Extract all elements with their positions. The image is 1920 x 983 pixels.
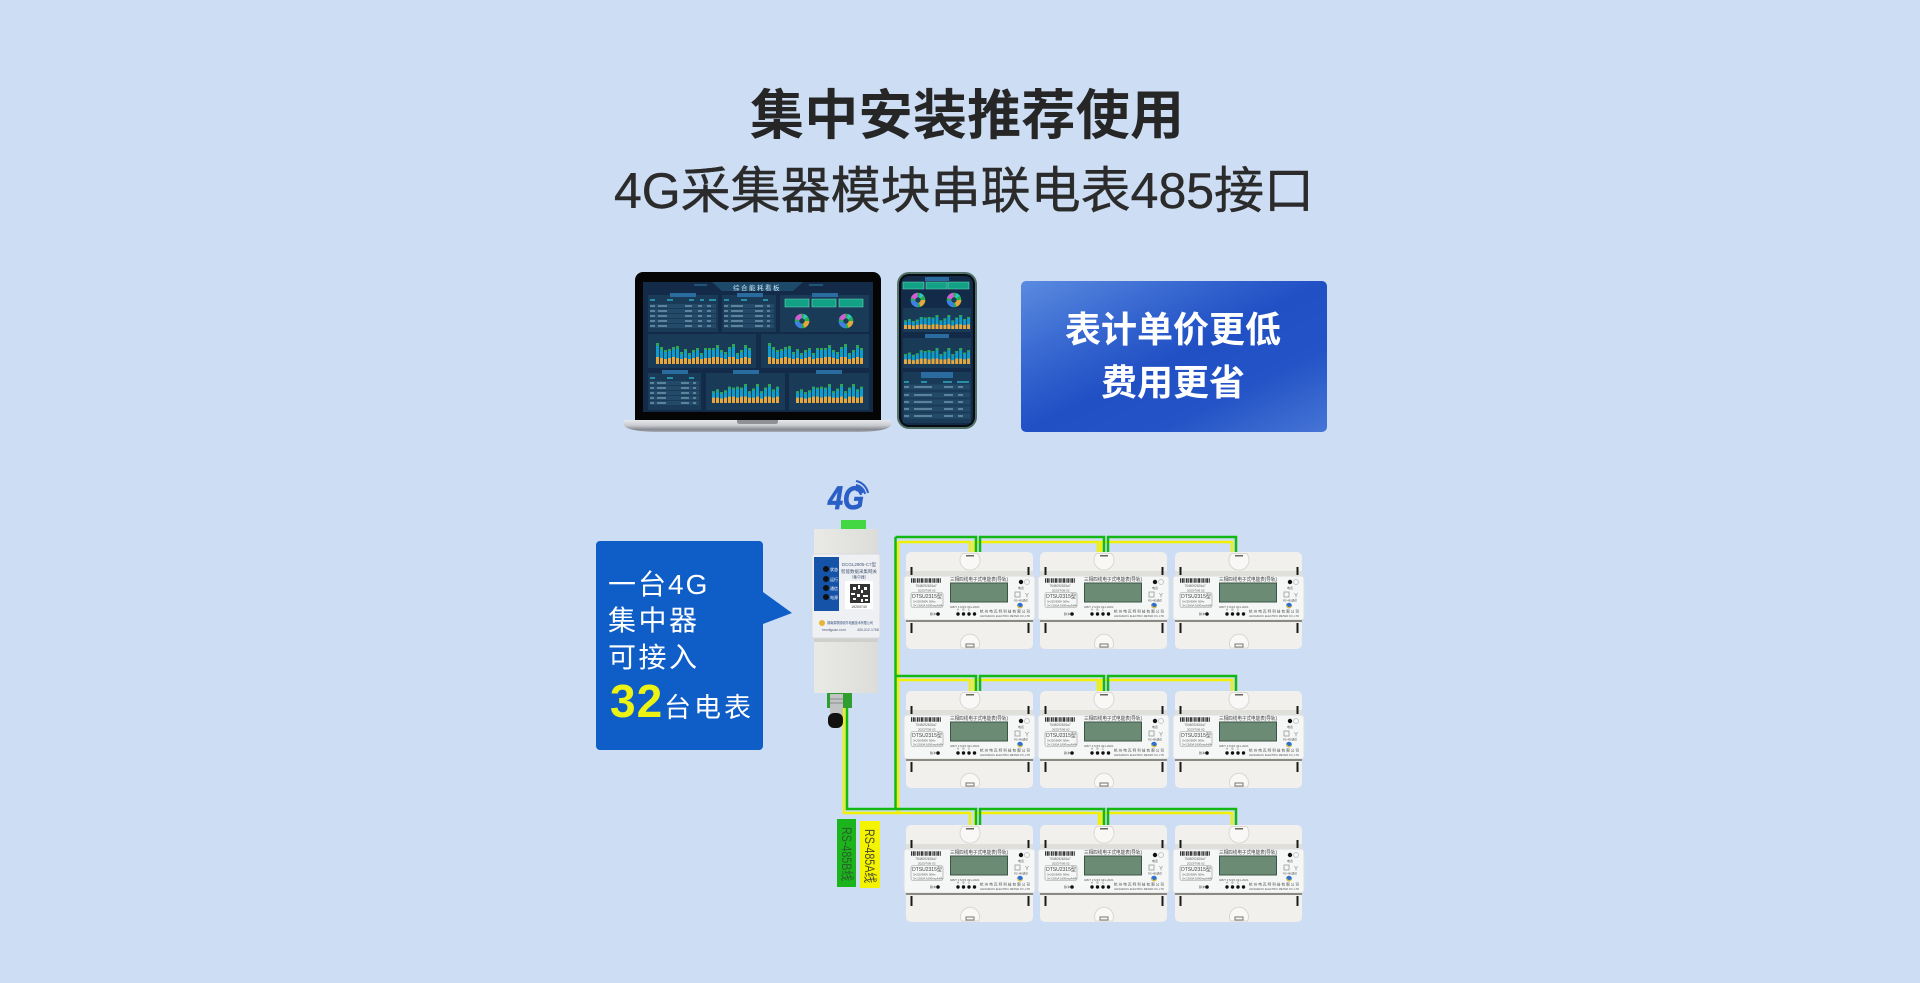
callout: one 4G concentrator connects 32 meters: 32	[610, 675, 663, 727]
callout: one 4G concentrator connects 32 meters: 可接入	[608, 642, 700, 673]
indicator strip: 状态	[830, 566, 838, 572]
callout button: lower meter price	[1021, 281, 1327, 432]
device face plate: 湖南易联德软件电器技术有限公司	[827, 620, 873, 625]
meter row 3 column 2	[1038, 825, 1169, 922]
meter row 2 column 2	[1038, 691, 1169, 788]
callout: one 4G concentrator connects 32 meters: 集中器	[608, 605, 700, 636]
callout: one 4G concentrator connects 32 meters	[596, 541, 792, 750]
label: RS-485 A line	[860, 821, 880, 888]
dashboard buttons	[785, 299, 863, 307]
indicator strip	[814, 557, 839, 611]
title: 集中安装推荐使用	[750, 71, 1184, 150]
wiring: RS-485 A line yellow	[844, 542, 1232, 825]
4G concentrator device	[812, 520, 880, 728]
wiring: RS-485 B line green	[847, 537, 1236, 825]
device face plate	[812, 554, 880, 638]
antenna connector	[828, 694, 843, 728]
QR code: 19200740	[851, 605, 867, 609]
device face plate: 400-012-1768	[857, 628, 879, 632]
subtitle: 4G采集器模块串联电表485接口	[614, 163, 1314, 219]
4G signal icon: 4G	[827, 480, 864, 516]
model text: DCGL2905-C7型	[842, 561, 877, 567]
indicator strip: 通信	[830, 585, 838, 591]
meter row 3 column 1	[904, 825, 1035, 922]
label: RS-485 A line: RS-485A线	[862, 829, 878, 883]
dashboard panels	[648, 295, 869, 410]
phone with dashboard	[897, 272, 977, 429]
meter row 2 column 1	[904, 691, 1035, 788]
device face plate: 智能数据采集网关	[841, 568, 877, 575]
laptop dashboard screen	[643, 282, 873, 412]
top green terminal	[841, 520, 866, 530]
device face plate: （集中器）	[850, 574, 868, 580]
bottom green terminal	[827, 693, 852, 708]
dashboard tables	[650, 306, 774, 403]
label: RS-485 B line: RS-485B线	[839, 827, 855, 881]
meter row 1 column 3	[1173, 552, 1304, 649]
label: RS-485 B line	[837, 819, 856, 887]
device body	[814, 529, 878, 693]
callout button: lower meter price: 表计单价更低	[1065, 301, 1281, 353]
indicator strip: 运行	[830, 576, 838, 582]
indicator strip: 电源	[830, 594, 838, 600]
company logo and text	[819, 620, 825, 626]
meter row 1 column 2	[1038, 552, 1169, 649]
dashboard bar charts	[656, 343, 863, 403]
callout: one 4G concentrator connects 32 meters: 台电表	[664, 693, 754, 723]
device face plate: hecdlguan.com	[822, 628, 846, 632]
meter row 2 column 3	[1173, 691, 1304, 788]
callout button: lower meter price: 费用更省	[1101, 354, 1245, 406]
dashboard title: 综合能耗看板	[733, 283, 781, 292]
meter row 1 column 1	[904, 552, 1035, 649]
callout: one 4G concentrator connects 32 meters: 一台4G	[608, 569, 709, 600]
laptop base	[624, 420, 891, 432]
meter row 3 column 3	[1173, 825, 1304, 922]
laptop screen bezel	[635, 272, 881, 421]
laptop with dashboard	[624, 272, 891, 432]
dashboard donut charts	[797, 316, 851, 326]
dashboard panel tabs	[662, 293, 842, 374]
